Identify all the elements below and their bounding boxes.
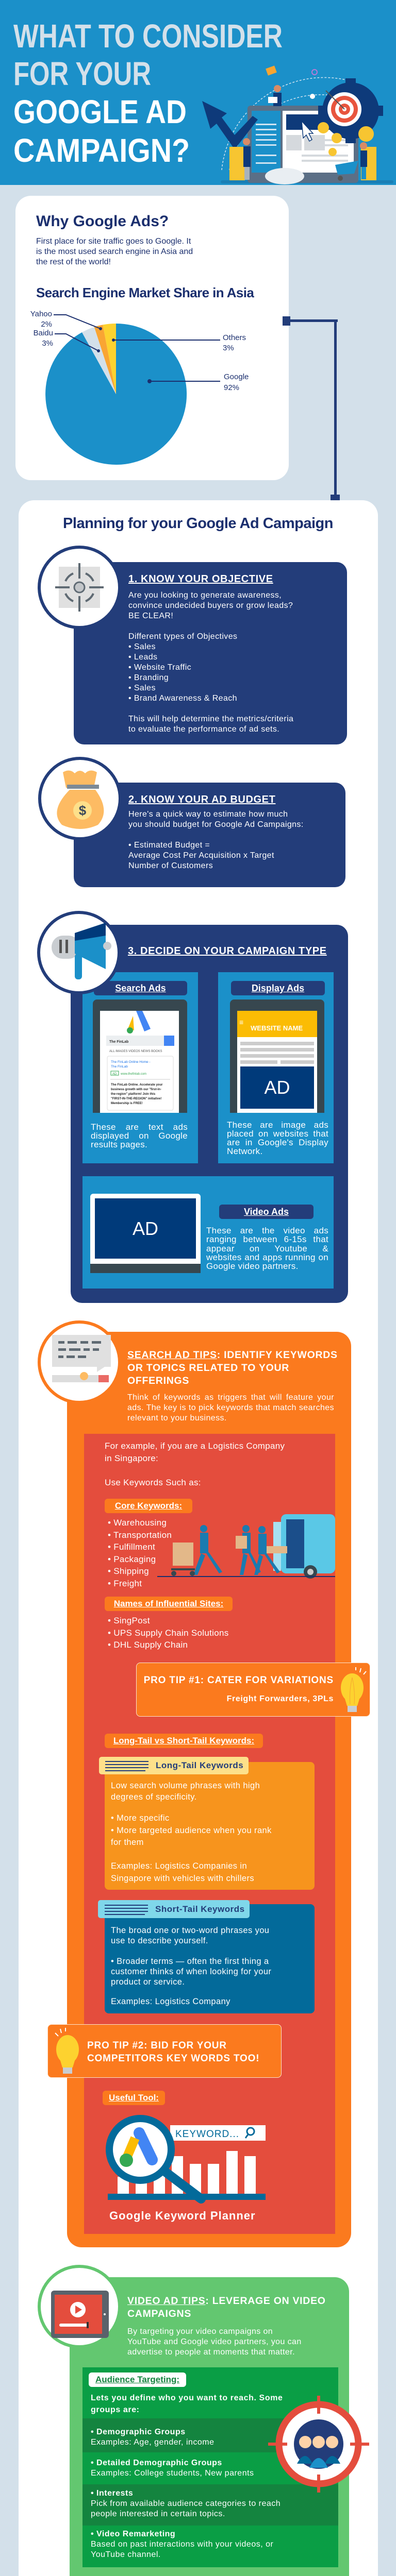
- panel: long-tail keywords: Examples: Logistics Companies in: [111, 1861, 247, 1871]
- panel: long-tail keywords: degrees of specificity.: [111, 1792, 197, 1802]
- panel: short-tail keywords: • Broader terms — often the first thing a: [111, 1957, 269, 1966]
- list: core keywords: • Transportation: [108, 1530, 172, 1539]
- panel: long-tail keywords: • More targeted audience when you rank: [111, 1826, 272, 1835]
- list: audience groups: Examples: Age, gender, income: [91, 2438, 214, 2447]
- panel: short-tail keywords: product or service.: [111, 1977, 185, 1987]
- text: budget: Average Cost Per Acquisition x Target: [128, 851, 274, 860]
- text: objective: • Branding: [128, 673, 169, 682]
- title: CAMPAIGN?: [13, 132, 190, 169]
- header banner: [0, 0, 396, 185]
- panel: short-tail keywords: Examples: Logistics Company: [111, 1997, 230, 2006]
- step 2 box: budget: [74, 783, 345, 887]
- callout: pro tip 1: [136, 1663, 370, 1717]
- text: budget: • Estimated Budget =: [128, 841, 210, 850]
- text: audience intro: Lets you define who you want to reach. Some: [91, 2394, 283, 2402]
- text: objective: • Leads: [128, 653, 157, 662]
- callout: pro tip 2: [47, 2024, 282, 2078]
- label: long vs short tail: Long-Tail vs Short-Tail Keywords:: [113, 1736, 254, 1745]
- panel: planning: [19, 500, 378, 2576]
- label: search ads: [94, 981, 187, 995]
- header illustration: marketing scene: [202, 65, 393, 184]
- text: objective: • Sales: [128, 642, 156, 651]
- heading: planning: Planning for your Google Ad Campaign: [63, 515, 333, 532]
- text: objective: convince undecided buyers or grow leads?: [128, 601, 293, 610]
- heading: market share: Search Engine Market Share in Asia: [36, 285, 254, 300]
- list: core keywords: [108, 1518, 172, 1588]
- list: influential sites: • UPS Supply Chain Solutions: [108, 1628, 229, 1637]
- text: video intro: [127, 2327, 302, 2357]
- text: search ads description: These are text ads displayed on Google results pages.: [91, 1122, 188, 1149]
- icon: audience target: [268, 2396, 369, 2493]
- panel: long-tail keywords: Low search volume phrases with high: [111, 1781, 260, 1790]
- text: intro: First place for site traffic goes to Google. It: [36, 237, 191, 246]
- panel: audience targeting: • Video Remarketing: [91, 2530, 175, 2538]
- search results phone mockup: business growth with our "first-in-: [111, 1088, 161, 1091]
- list: core keywords: • Warehousing: [108, 1518, 167, 1528]
- panel: long-tail keywords: • More specific: [111, 1814, 170, 1823]
- display ad phone mockup: WEBSITE NAME: [251, 1024, 303, 1032]
- panel: video ads: [82, 1176, 334, 1289]
- panel: why google ads: [15, 196, 289, 480]
- panel: audience targeting: • Detailed Demographic Groups: [91, 2459, 222, 2467]
- search results phone mockup: [93, 999, 187, 1113]
- list: core keywords: • Shipping: [108, 1566, 149, 1576]
- text: objective: BE CLEAR!: [128, 612, 173, 620]
- pie chart: search engine market share: 3%: [223, 344, 234, 352]
- callout: pro tip 1: PRO TIP #1: CATER FOR VARIATIONS: [144, 1675, 334, 1686]
- heading: video ad tips: VIDEO AD TIPS: LEVERAGE ON VIDEO: [127, 2295, 326, 2307]
- label: core keywords: [105, 1499, 192, 1513]
- text: intro: the rest of the world!: [36, 258, 111, 266]
- tab: long-tail heading: [99, 1757, 249, 1774]
- panel: short-tail keywords: use to describe yourself.: [111, 1936, 208, 1945]
- panel: audience targeting: • Interests: [91, 2489, 133, 2498]
- panel: long-tail keywords: [105, 1762, 315, 1890]
- heading: search ad tips: OR TOPICS RELATED TO YOUR: [127, 1362, 289, 1374]
- search results phone mockup: AD: [112, 1073, 117, 1076]
- search results phone mockup: "FIRST-IN-THE-REGION" initiative!: [111, 1097, 161, 1100]
- text: video intro: advertise to people at moments that matter.: [127, 2348, 295, 2357]
- icon: keyword search bar: [38, 1320, 121, 1404]
- tab: short-tail heading: [98, 1900, 250, 1918]
- list: influential sites: • DHL Supply Chain: [108, 1640, 188, 1650]
- video player mockup: [90, 1194, 201, 1273]
- pie chart: search engine market share: Baidu: [34, 329, 53, 337]
- list: core keywords: • Fulfillment: [108, 1542, 155, 1552]
- pie chart: search engine market share: Others: [223, 333, 246, 342]
- panel: audience targeting: [82, 2367, 338, 2567]
- text: example intro: For example, if you are a Logistics Company: [105, 1441, 285, 1451]
- connector arrow: [283, 316, 340, 500]
- panel: audience targeting: Based on past interactions with your videos, or: [91, 2540, 273, 2549]
- text: budget: [128, 810, 304, 870]
- callout: pro tip 2: PRO TIP #2: BID FOR YOUR: [87, 2040, 227, 2051]
- title: WHAT TO CONSIDER: [13, 18, 283, 55]
- icon: money bag: $: [79, 803, 87, 818]
- label: audience targeting: [89, 2372, 186, 2387]
- icon: target crosshair: [38, 546, 121, 629]
- panel: search ads: [82, 972, 198, 1163]
- display ad phone mockup: [230, 999, 324, 1113]
- text: example intro: Use Keywords Such as:: [105, 1478, 201, 1487]
- panel: keyword examples: [84, 1434, 335, 2234]
- pie chart: search engine market share: Google: [224, 372, 249, 381]
- label: video ads: Video Ads: [244, 1207, 289, 1217]
- label: influential sites: [105, 1597, 233, 1611]
- text: objective: • Website Traffic: [128, 663, 191, 672]
- text: objective: [128, 591, 293, 734]
- heading: know your ad budget: 2. KNOW YOUR AD BUDGET: [128, 794, 275, 805]
- list: influential sites: [108, 1616, 229, 1650]
- text: example intro: [105, 1441, 285, 1487]
- icon: megaphone: [37, 911, 121, 994]
- search results phone mockup: The FinLab: [111, 1065, 128, 1069]
- title: GOOGLE AD: [13, 93, 187, 130]
- panel: long-tail keywords: Singapore with vehicles with chillers: [111, 1873, 254, 1883]
- panel: audience targeting: Pick from available audience categories to reach: [91, 2499, 280, 2508]
- panel: long-tail keywords: for them: [111, 1838, 144, 1847]
- text: display ads description: These are image ads placed on websites that are in Google's Display Network.: [227, 1120, 328, 1156]
- label: influential sites: Names of Influential Sites:: [114, 1599, 223, 1608]
- text: objective: This will help determine the metrics/criteria: [128, 715, 293, 723]
- list: core keywords: • Packaging: [108, 1554, 156, 1564]
- step 1 box: objective: [74, 562, 347, 744]
- display ad phone mockup: ≡: [239, 1018, 243, 1026]
- heading: why google ads: Why Google Ads?: [36, 213, 169, 230]
- search results phone mockup: The FinLab: [109, 1040, 128, 1044]
- heading: video ad tips: [127, 2295, 326, 2319]
- panel: audience targeting: YouTube channel.: [91, 2550, 161, 2559]
- icon: lightbulb: [55, 2028, 79, 2074]
- label: display ads: [231, 981, 325, 995]
- search results phone mockup: The FinLab Online. Accelerate your: [111, 1083, 163, 1087]
- search results phone mockup: The FinLab Online Home -: [111, 1060, 151, 1064]
- pie chart: search engine market share: Yahoo: [30, 310, 52, 318]
- text: keywords intro: Think of keywords as triggers that will feature your ads. The key is to pick keywords that match searches relevant to your business.: [127, 1393, 334, 1422]
- search results phone mockup: Membership is FREE!: [111, 1102, 143, 1105]
- heading: search ad tips: OFFERINGS: [127, 1375, 189, 1386]
- text: intro: is the most used search engine in Asia and: [36, 247, 193, 256]
- panel: search ad tips: [67, 1332, 351, 2247]
- pie chart: search engine market share: 2%: [41, 320, 52, 329]
- text: objective: • Brand Awareness & Reach: [128, 694, 237, 703]
- label: search ads: Search Ads: [115, 983, 166, 993]
- panel: audience targeting: people interested in certain topics.: [91, 2510, 225, 2518]
- text: objective: Are you looking to generate awareness,: [128, 591, 282, 600]
- search results phone mockup: the-region" platform! Join this: [111, 1093, 156, 1096]
- text: example intro: in Singapore:: [105, 1453, 158, 1463]
- text: audience intro: groups are:: [91, 2405, 140, 2414]
- label: video ads: [219, 1205, 314, 1219]
- illustration: logistics workers: [157, 1514, 335, 1579]
- heading: decide on campaign type: 3. DECIDE ON YOUR CAMPAIGN TYPE: [128, 945, 327, 957]
- tab: long-tail heading: Long-Tail Keywords: [156, 1760, 243, 1770]
- caption: google keyword planner: Google Keyword Planner: [109, 2209, 256, 2222]
- heading: search ad tips: SEARCH AD TIPS: IDENTIFY KEYWORDS: [127, 1349, 338, 1361]
- step 3 box: campaign type: [71, 925, 348, 1303]
- illustration: google keyword planner: KEYWORD...: [175, 2129, 239, 2140]
- heading: video ad tips: CAMPAIGNS: [127, 2308, 191, 2319]
- pie chart: search engine market share: 92%: [224, 383, 239, 392]
- text: objective: • Sales: [128, 684, 156, 692]
- list: core keywords: • Freight: [108, 1579, 142, 1588]
- text: video intro: YouTube and Google video partners, you can: [127, 2337, 302, 2346]
- text: audience intro: [91, 2394, 283, 2414]
- label: display ads: Display Ads: [252, 983, 304, 993]
- text: objective: to evaluate the performance of ad sets.: [128, 725, 279, 734]
- title: [13, 18, 283, 169]
- video player mockup: AD: [133, 1218, 158, 1239]
- text: budget: Number of Customers: [128, 861, 213, 870]
- search results phone mockup: www.thefinlab.com: [120, 1073, 146, 1076]
- panel: audience targeting: Examples: College students, New parents: [91, 2469, 254, 2478]
- label: long vs short tail: [105, 1734, 263, 1748]
- panel: video ad tips: [70, 2277, 349, 2576]
- pie chart: search engine market share: [30, 310, 249, 465]
- panel: short-tail keywords: The broad one or two-word phrases you: [111, 1926, 269, 1935]
- callout: pro tip 1: Freight Forwarders, 3PLs: [227, 1694, 334, 1703]
- panel: short-tail keywords: customer thinks of when looking for your: [111, 1967, 271, 1976]
- label: core keywords: Core Keywords:: [115, 1501, 182, 1511]
- label: useful tool: Useful Tool:: [109, 2093, 159, 2103]
- list: audience groups: [91, 2428, 214, 2447]
- label: useful tool: [103, 2091, 165, 2105]
- heading: search ad tips: [127, 1349, 338, 1386]
- list: influential sites: • SingPost: [108, 1616, 150, 1625]
- text: video ads description: These are the video ads ranging between 6-15s that appear on Youtube & websites and apps running on Google video partners.: [206, 1226, 328, 1271]
- callout: pro tip 2: COMPETITORS KEY WORDS TOO!: [87, 2053, 259, 2064]
- icon: money bag: [38, 757, 122, 840]
- list: audience groups: • Demographic Groups: [91, 2428, 186, 2436]
- text: video intro: By targeting your video campaigns on: [127, 2327, 273, 2336]
- search results phone mockup: ALL IMAGES VIDEOS NEWS BOOKS: [109, 1050, 162, 1053]
- title: FOR YOUR: [13, 55, 151, 92]
- text: objective: Different types of Objectives: [128, 632, 237, 641]
- text: intro: [36, 237, 193, 266]
- heading: know your objective: 1. KNOW YOUR OBJECTIVE: [128, 573, 273, 585]
- panel: display ads: [218, 972, 334, 1163]
- tab: short-tail heading: Short-Tail Keywords: [155, 1904, 245, 1914]
- icon: video tablet: [38, 2265, 121, 2348]
- label: audience targeting: Audience Targeting:: [95, 2375, 179, 2384]
- text: budget: you should budget for Google Ad Campaigns:: [128, 820, 304, 829]
- pie chart: search engine market share: 3%: [42, 339, 53, 348]
- text: budget: Here's a quick way to estimate how much: [128, 810, 288, 819]
- illustration: google keyword planner: [106, 2115, 266, 2204]
- display ad phone mockup: AD: [264, 1077, 290, 1098]
- panel: short-tail keywords: [105, 1904, 315, 2013]
- icon: lightbulb: [341, 1667, 367, 1712]
